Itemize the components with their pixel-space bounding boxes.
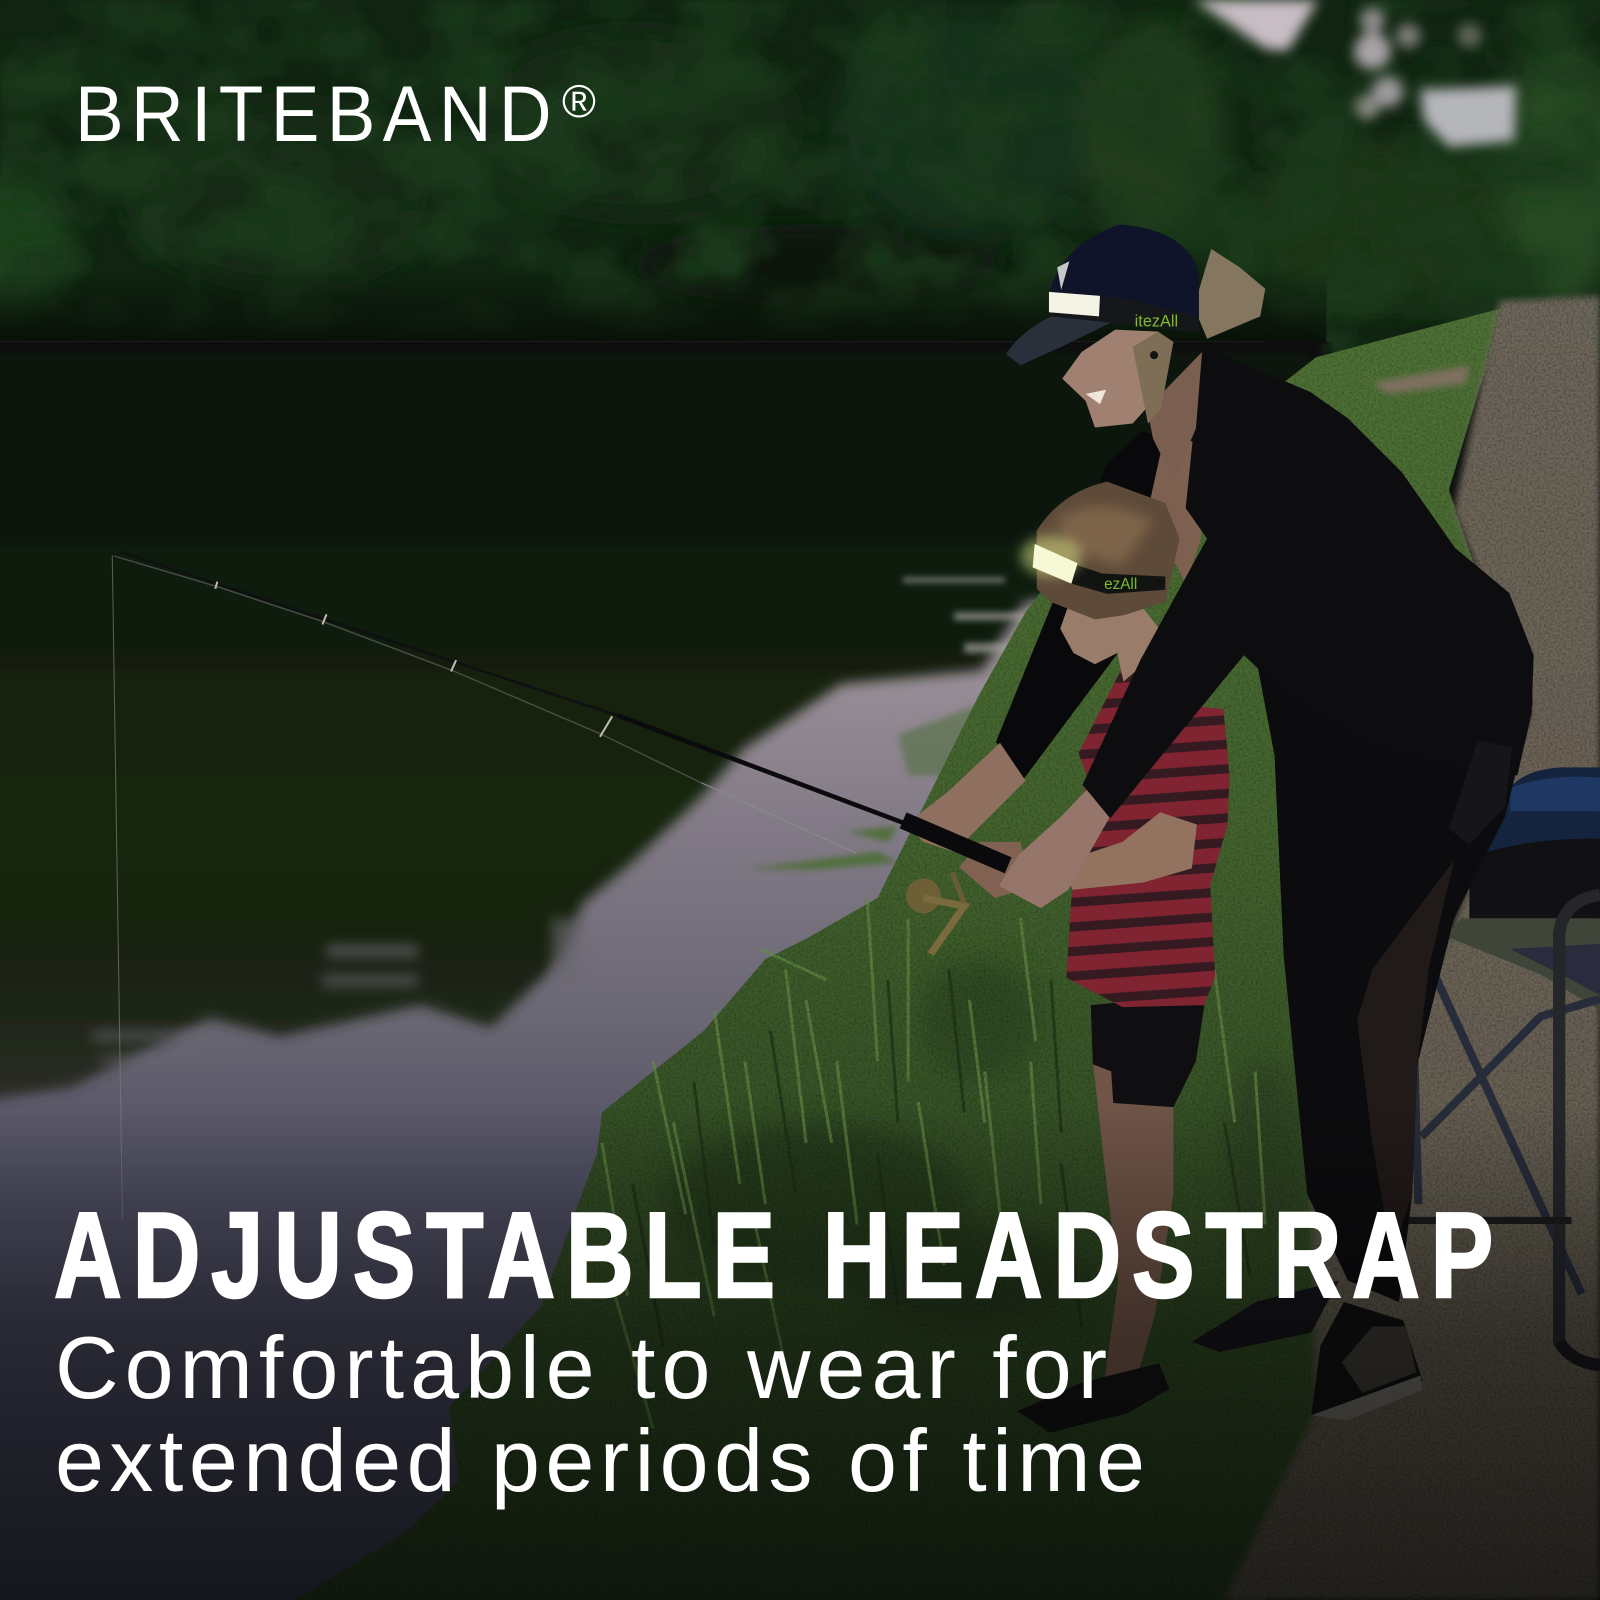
woman: neck	[1148, 352, 1202, 480]
woman: smile	[1086, 390, 1106, 404]
woman: phone holster	[1449, 741, 1512, 845]
front arm forearm and hand	[999, 790, 1110, 908]
brand logo: BRITEBAND	[75, 69, 559, 158]
tree line fade into water	[0, 270, 1327, 344]
woman: back hand	[906, 743, 1026, 852]
boy: arm	[1061, 812, 1197, 890]
headband strap: boy	[1071, 563, 1165, 594]
woman: shirt and front arm	[1083, 347, 1534, 818]
folding chair	[1367, 767, 1600, 1365]
boy: shoe	[1017, 1363, 1169, 1433]
boy	[959, 482, 1230, 1433]
headlamp light: boy	[1033, 544, 1078, 584]
background tree line and sky	[0, 0, 1600, 367]
front sleeve overlap	[1083, 539, 1244, 818]
itezAll strap lettering: woman: itezAll	[1135, 313, 1178, 331]
fishing rod	[112, 552, 1008, 1219]
sky gap	[1194, 0, 1516, 147]
boy: neck and face	[1060, 592, 1169, 682]
headlamp light: woman	[1049, 292, 1100, 316]
headlamp glow: boy	[1020, 536, 1082, 577]
woman: bun	[1194, 249, 1265, 339]
woman: back sleeve	[996, 431, 1184, 781]
boy: hands	[959, 842, 1031, 898]
river water	[0, 306, 1327, 1600]
subheading: Comfortable to wear for	[55, 1318, 1107, 1417]
woman	[906, 224, 1534, 1420]
woman: face	[1062, 330, 1161, 428]
woman: chest	[1148, 439, 1209, 584]
boy: red striped shirt	[1066, 655, 1230, 1007]
boy: legs	[1093, 1061, 1173, 1411]
woman: shoes	[1192, 1281, 1422, 1420]
gravel path	[1214, 296, 1600, 1600]
boy: shorts	[1091, 994, 1206, 1107]
grassy bank	[276, 306, 1510, 1600]
woman: ear gauge	[1150, 351, 1158, 359]
subheading: extended periods of time	[55, 1411, 1145, 1510]
tree reflection	[0, 306, 1327, 1107]
bottom vignette	[0, 1102, 1600, 1600]
boy: hair	[1037, 482, 1180, 619]
itezAll strap lettering: boy: ezAll	[1104, 576, 1137, 593]
fishing reel	[906, 872, 964, 954]
registered mark: ®	[562, 75, 596, 127]
subheading	[55, 1318, 1145, 1510]
woman: blond hair strands	[1133, 332, 1173, 423]
cap	[1006, 224, 1199, 365]
woman: leggings	[1255, 653, 1533, 1302]
